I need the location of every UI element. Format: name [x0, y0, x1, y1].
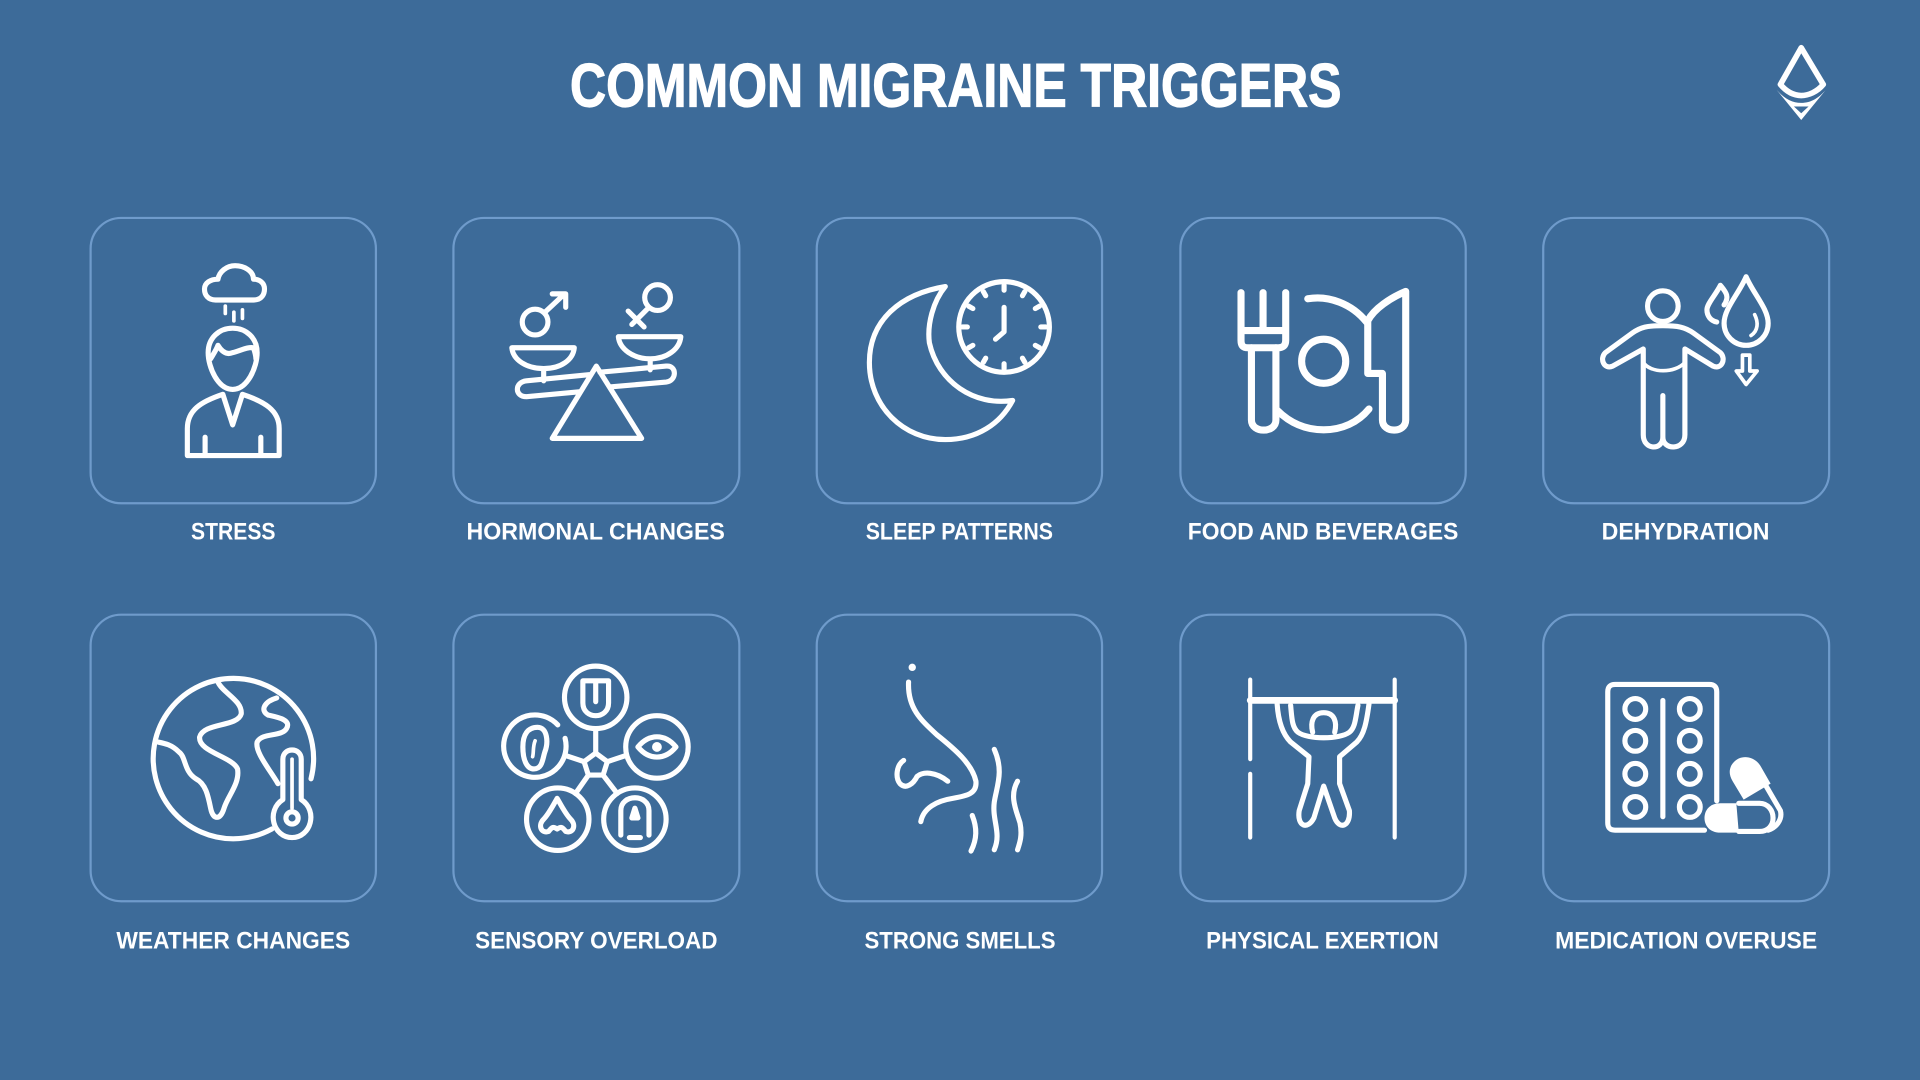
panel: medication overuse — [1543, 615, 1829, 954]
label: MEDICATION OVERUSE — [1555, 927, 1817, 954]
panel: strong smells — [817, 615, 1102, 954]
panel: sleep patterns — [817, 218, 1102, 545]
panel: sensory overload — [453, 615, 739, 954]
icon: five senses network — [504, 666, 688, 850]
label: STRONG SMELLS — [864, 927, 1056, 954]
label: DEHYDRATION — [1602, 518, 1769, 545]
icon: blister pack and capsules — [1608, 684, 1781, 833]
icon: balance scale with gender symbols — [512, 285, 681, 438]
icon: globe with thermometer — [153, 678, 314, 839]
icon: fork, plate and knife — [1241, 291, 1406, 430]
icon: logo — [1774, 48, 1828, 120]
label: HORMONAL CHANGES — [467, 518, 725, 545]
label: WEATHER CHANGES — [116, 927, 350, 954]
panel: stress — [91, 218, 376, 545]
icon: person with water drops — [1603, 277, 1768, 447]
title: COMMON MIGRAINE TRIGGERS — [570, 52, 1341, 120]
icon: stress person under rain cloud — [187, 266, 279, 456]
label: SENSORY OVERLOAD — [475, 927, 718, 954]
panel: hormonal changes — [453, 218, 739, 545]
panel: food and beverages — [1180, 218, 1466, 545]
label: FOOD AND BEVERAGES — [1188, 518, 1458, 545]
icon: nose with scent lines — [897, 664, 1021, 851]
label: SLEEP PATTERNS — [866, 518, 1053, 545]
icon: person doing pull-ups — [1250, 680, 1395, 838]
panel: dehydration — [1543, 218, 1829, 545]
panel: weather changes — [91, 615, 376, 954]
label: PHYSICAL EXERTION — [1206, 927, 1439, 954]
panel: physical exertion — [1180, 615, 1466, 954]
label: STRESS — [191, 518, 276, 545]
icon: moon and clock — [869, 282, 1049, 440]
